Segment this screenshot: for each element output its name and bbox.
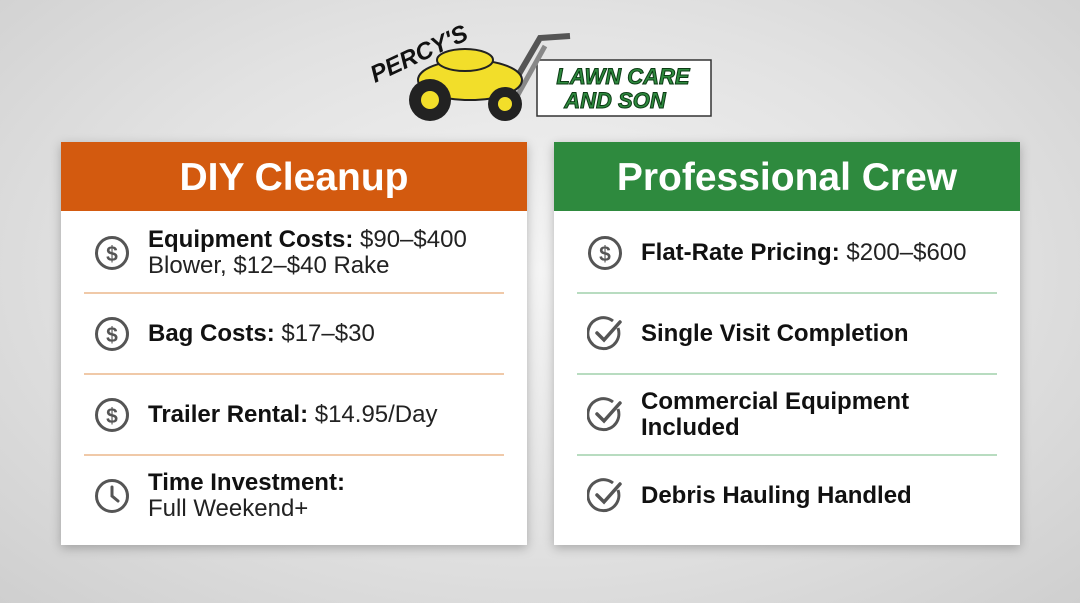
heading: DIY Cleanup: DIY Cleanup xyxy=(180,156,408,199)
item: debris hauling: Debris Hauling Handled xyxy=(641,482,912,508)
heading: Professional Crew: Professional Crew xyxy=(617,156,957,199)
item: debris hauling xyxy=(587,478,912,512)
heading: DIY Cleanup xyxy=(61,142,527,211)
item: bag costs xyxy=(95,317,375,351)
item: trailer rental: Trailer Rental: $14.95/Day xyxy=(148,400,437,428)
item: equipment costs xyxy=(95,226,467,278)
item: flat-rate pricing xyxy=(588,236,966,270)
item: bag costs: $ xyxy=(106,324,118,346)
logo xyxy=(366,20,712,121)
item: single visit xyxy=(587,316,909,350)
item: trailer rental: $ xyxy=(106,404,118,428)
item: commercial equipment xyxy=(587,388,909,440)
item: time investment xyxy=(95,468,345,522)
heading: Professional Crew xyxy=(554,142,1020,211)
item: trailer rental xyxy=(95,398,438,432)
item: equipment costs: Blower, $12–$40 Rake xyxy=(148,252,390,278)
panel: DIY Cleanup xyxy=(61,142,527,545)
item: time investment: Time Investment: xyxy=(148,468,345,496)
logo: LAWN CARE xyxy=(556,64,691,89)
item: equipment costs: Equipment Costs: $90–$400 xyxy=(148,226,467,252)
item: equipment costs: $ xyxy=(106,242,118,266)
item: flat-rate pricing: $ xyxy=(599,242,611,266)
item: commercial equipment: Commercial Equipment xyxy=(641,388,909,414)
item: single visit: Single Visit Completion xyxy=(641,320,909,346)
item: flat-rate pricing: Flat-Rate Pricing: $200–$600 xyxy=(641,238,966,266)
panel: Professional Crew xyxy=(554,142,1020,545)
item: time investment: Full Weekend+ xyxy=(148,494,308,522)
logo: PERCY'S xyxy=(366,20,472,88)
logo: AND SON xyxy=(563,88,667,113)
logo box xyxy=(537,60,711,116)
item: commercial equipment: Included xyxy=(641,414,740,440)
item: bag costs: Bag Costs: $17–$30 xyxy=(148,320,375,346)
